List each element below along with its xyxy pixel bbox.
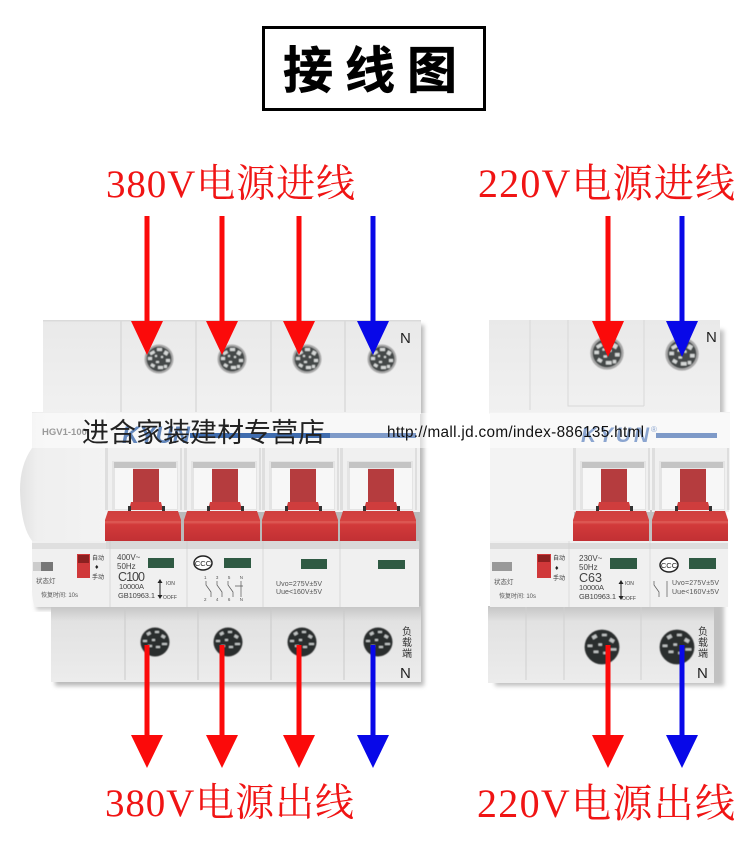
- rating text: GB10963.1: [118, 591, 155, 600]
- heading: 380V output: 380V电源出线: [105, 782, 354, 825]
- bottom terminal block: 载: [698, 637, 708, 649]
- indicator windows: [148, 558, 174, 568]
- CCC mark: CCC: [661, 561, 678, 570]
- bottom terminal block: [488, 606, 714, 683]
- rating text: ION: [166, 581, 175, 587]
- label panel: 恢复时间: 10s: [41, 591, 78, 599]
- CCC mark: [660, 558, 678, 572]
- indicator windows: [610, 558, 637, 569]
- main body: [106, 412, 420, 512]
- bottom terminal block: 负: [402, 625, 412, 638]
- label panel: 手动: [553, 574, 565, 582]
- breaker: four-pole 380V: [20, 320, 424, 686]
- heading: 380V input: 380V电源进线: [106, 163, 355, 206]
- arrows: 220V in: [592, 216, 698, 357]
- label panel: 自动: [553, 554, 565, 562]
- bottom terminal block: 端: [402, 647, 412, 660]
- rating text: C100: [118, 570, 145, 584]
- arrows: 380V in: [131, 216, 389, 355]
- label panel: [32, 541, 420, 607]
- circuit diagram: [206, 581, 243, 597]
- label panel: 1 3 5 N: [204, 575, 243, 580]
- CCC mark: CCC: [195, 559, 212, 568]
- breaker poles: [573, 448, 729, 541]
- label panel: [490, 541, 728, 607]
- circuit diagram: [654, 581, 667, 597]
- bottom terminal block: 负: [698, 625, 708, 638]
- top terminal block: N: [706, 329, 717, 346]
- breaker: two-pole 220V: [488, 320, 730, 686]
- rating text: [579, 554, 636, 602]
- rating text: OOFF: [163, 595, 177, 601]
- rating text: ION: [625, 581, 634, 587]
- auto manual switch: [77, 554, 90, 578]
- brand logo and line, right: KYUN: [581, 424, 650, 447]
- CCC mark: [194, 556, 212, 570]
- brand logo and line, right: [581, 424, 717, 447]
- watermark: url: http://mall.jd.com/index-886135.html: [387, 424, 644, 441]
- rating text: GB10963.1: [579, 592, 616, 601]
- auto manual switch: [537, 554, 551, 578]
- top terminal block: [43, 320, 421, 414]
- bottom terminal block: [51, 606, 421, 682]
- brand logo and line, left: KYUN: [122, 422, 191, 449]
- rating text: OOFF: [622, 596, 636, 602]
- label panel: 手动: [92, 573, 104, 581]
- label panel: 2 4 6 N: [204, 597, 243, 602]
- breaker poles: [105, 448, 417, 541]
- label panel: ♦: [555, 565, 559, 572]
- rating text: 10000A: [579, 583, 604, 592]
- bottom terminal block: 端: [698, 647, 708, 660]
- label panel: 状态灯: [36, 576, 56, 585]
- bottom terminal block: N: [697, 665, 708, 682]
- voltage text: Uue<160V±5V: [672, 589, 719, 596]
- model label: HGV1-100: [42, 427, 87, 438]
- voltage text: [276, 581, 322, 596]
- label panel: 状态灯: [494, 577, 514, 586]
- handle housing: [490, 412, 730, 543]
- heading: 220V input: 220V电源进线: [478, 161, 735, 206]
- voltage text: Uvo=275V±5V: [672, 580, 719, 587]
- rating text: 230V~: [579, 554, 603, 563]
- rating text: 10000A: [119, 582, 144, 591]
- watermark: store name: 进合家装建材专营店: [82, 418, 325, 448]
- top terminal block: [489, 320, 720, 414]
- rating text: 50Hz: [117, 562, 136, 571]
- label panel: ♦: [95, 564, 99, 571]
- voltage text: [672, 580, 719, 596]
- rating text: 400V~: [117, 553, 141, 562]
- bottom terminal block: N: [400, 665, 411, 682]
- status light: [492, 562, 512, 571]
- arrows: 220V out: [592, 645, 698, 768]
- brand logo and line, right: ®: [651, 425, 657, 434]
- voltage text: Uvo=275V±5V: [276, 581, 322, 588]
- top terminal block: N: [400, 330, 411, 347]
- rating text: 50Hz: [579, 563, 598, 572]
- title box: [264, 28, 484, 110]
- watermark band: [31, 413, 750, 448]
- title text: 接线图: [283, 43, 457, 99]
- arrows: 380V out: [131, 645, 389, 768]
- label panel: 恢复时间: 10s: [499, 592, 536, 600]
- brand logo and line, left: [122, 422, 416, 449]
- voltage text: Uue<160V±5V: [276, 589, 322, 596]
- heading: 220V output: 220V电源出线: [477, 781, 735, 826]
- status light: [33, 562, 53, 571]
- handle housing: [20, 412, 108, 543]
- rating text: C63: [579, 571, 602, 585]
- rating text: [117, 553, 177, 601]
- label panel: 自动: [92, 554, 104, 562]
- bottom terminal block: 载: [402, 637, 412, 649]
